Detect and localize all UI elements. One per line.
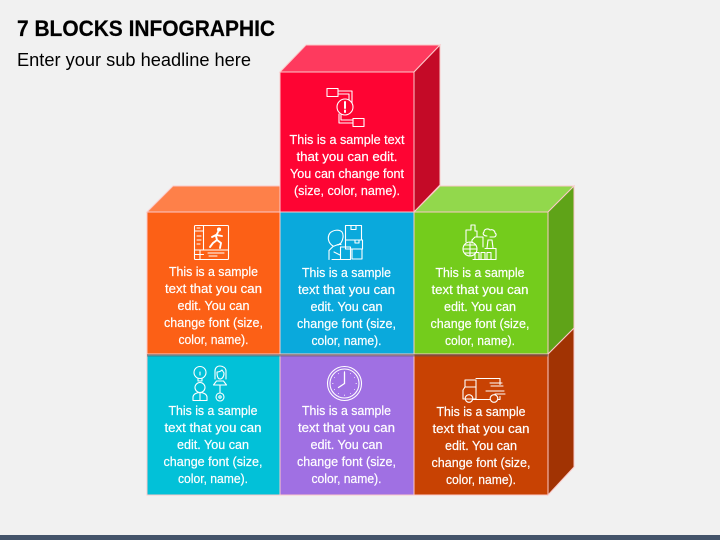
text: orange block: change font (size, bbox=[164, 315, 263, 330]
subtitle: Enter your sub headline here bbox=[17, 50, 251, 70]
block: blue bbox=[280, 212, 414, 354]
text: cyan block: color, name). bbox=[178, 471, 248, 486]
text: red block: (size, color, name). bbox=[294, 183, 400, 198]
text: cyan block: edit. You can bbox=[177, 437, 249, 452]
text: purple block: color, name). bbox=[312, 471, 382, 486]
text: rust block: color, name). bbox=[446, 472, 516, 487]
text: red block: that you can edit. bbox=[296, 149, 398, 164]
text: cyan block: change font (size, bbox=[164, 454, 262, 469]
block: green bbox=[414, 186, 574, 354]
text: blue block bbox=[297, 265, 396, 348]
footer bar bbox=[0, 535, 720, 540]
text: blue block: color, name). bbox=[312, 333, 382, 348]
icon: delivery truck bbox=[463, 378, 505, 402]
icon: running figure on screen bbox=[194, 226, 228, 260]
text: rust block: This is a sample bbox=[436, 404, 526, 419]
text: purple block: change font (size, bbox=[297, 454, 396, 469]
text: green block: color, name). bbox=[445, 333, 515, 348]
text: purple block: This is a sample bbox=[302, 403, 391, 418]
text: cyan block: This is a sample bbox=[168, 403, 258, 418]
block: cyan bbox=[147, 355, 280, 495]
text: orange block: text that you can bbox=[165, 281, 262, 296]
block: red top bbox=[280, 45, 440, 212]
text: blue block: text that you can bbox=[298, 282, 395, 297]
icon: factory and globe bbox=[463, 225, 496, 260]
text: blue block: This is a sample bbox=[302, 265, 391, 280]
text: blue block: change font (size, bbox=[297, 316, 396, 331]
text: purple block: edit. You can bbox=[310, 437, 382, 452]
icon: cable with warning bbox=[327, 88, 364, 126]
icon: clock bbox=[328, 366, 362, 400]
text: orange block: color, name). bbox=[178, 332, 248, 347]
text: green block: change font (size, bbox=[430, 316, 530, 331]
text: cyan block: text that you can bbox=[164, 420, 262, 435]
text: red block bbox=[290, 132, 405, 198]
icon: delivery person with boxes bbox=[328, 226, 362, 260]
row shadow bbox=[147, 354, 548, 356]
text: cyan block bbox=[164, 403, 262, 486]
text: orange block bbox=[164, 264, 263, 347]
text: rust block: edit. You can bbox=[445, 438, 517, 453]
title: 7 BLOCKS INFOGRAPHIC bbox=[17, 16, 275, 41]
icon: people with idea and gear bbox=[193, 366, 226, 401]
block: purple bbox=[280, 355, 414, 495]
text: red block: You can change font bbox=[290, 166, 404, 181]
block: orange bbox=[147, 186, 280, 354]
text: orange block: edit. You can bbox=[178, 298, 250, 313]
text: blue block: edit. You can bbox=[310, 299, 382, 314]
block: rust bbox=[414, 328, 574, 495]
text: green block: This is a sample bbox=[436, 265, 524, 280]
text: purple block bbox=[297, 403, 396, 486]
text: green block: edit. You can bbox=[444, 299, 516, 314]
text: green block bbox=[430, 265, 530, 348]
text: rust block: change font (size, bbox=[432, 455, 530, 470]
text: green block: text that you can bbox=[432, 282, 528, 297]
text: rust block: text that you can bbox=[432, 421, 530, 436]
text: purple block: text that you can bbox=[298, 420, 395, 435]
text: orange block: This is a sample bbox=[169, 264, 258, 279]
text: red block: This is a sample text bbox=[290, 132, 405, 147]
text: rust block bbox=[432, 404, 530, 487]
